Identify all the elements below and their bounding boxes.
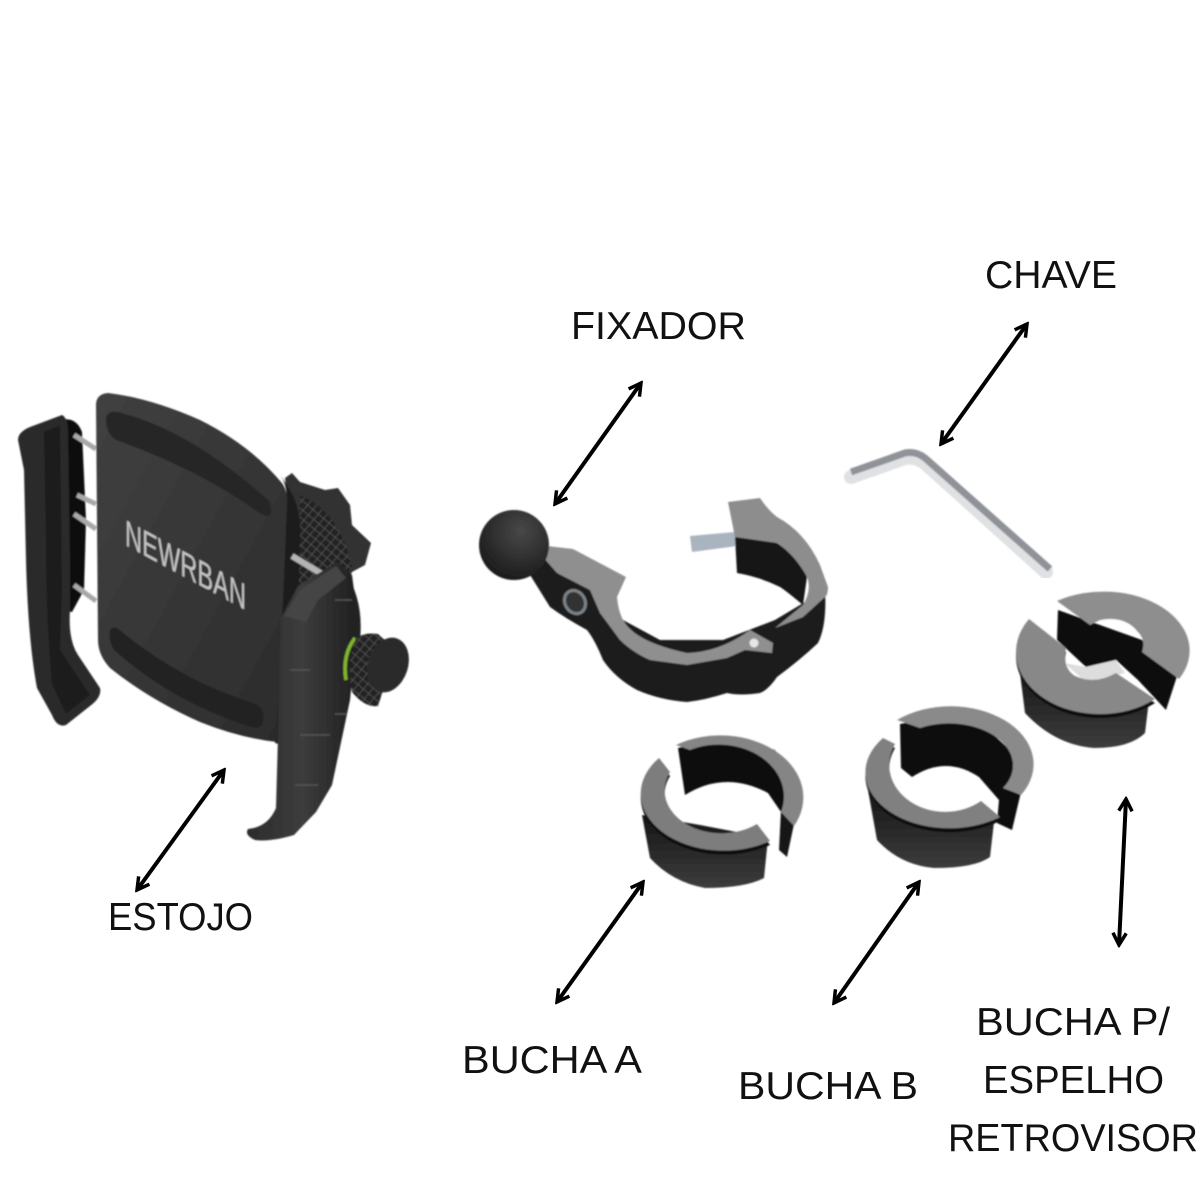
arrow: estojo [137,770,224,890]
inner slot wall [1057,610,1179,710]
threaded bolt [690,532,737,552]
logo: NEWRBAN [125,512,246,619]
arrow: chave [941,324,1027,444]
label: chave: CHAVE [985,254,1117,297]
label: fixador: FIXADOR [571,305,746,348]
body [1019,665,1149,748]
phone plate [96,393,287,742]
label: bucha para espelho retrovisor: RETROVISOR [948,1117,1198,1160]
arrow: bucha B [834,882,919,1003]
clamp gray top left [538,545,773,665]
front ring top [1016,619,1155,714]
label: bucha para espelho retrovisor: ESPELHO [983,1059,1164,1102]
clamp ball [479,510,549,580]
label: bucha B: BUCHA B [738,1065,918,1108]
guide rods [74,435,96,601]
inner back wall [678,738,792,812]
left clamp arm [18,415,100,726]
clamp black outer body [527,545,825,702]
front ring rim [865,742,1000,832]
side tab [779,810,794,857]
inner back wall [900,715,1021,830]
label: estojo: ESTOJO [108,896,253,939]
label: bucha para espelho retrovisor [948,1001,1198,1160]
front ring rim [1016,623,1155,718]
product: handlebar clamp (fixador) [479,498,828,702]
product: phone holder case [18,393,416,840]
right clamp arm [247,562,358,840]
guide rod right [292,556,322,574]
front ring top [865,738,1000,828]
body [642,815,768,888]
front ring rim [641,762,770,855]
clamp inner wall [735,537,807,605]
label: bucha A: BUCHA A [462,1039,642,1082]
rear knurled knob [285,473,371,640]
plate top rubber pad [106,412,271,516]
center hole [1064,660,1125,682]
body [868,790,994,868]
front ring top [641,758,770,851]
label: bucha para espelho retrovisor: BUCHA P/ [976,1001,1170,1044]
hinge pin [750,638,758,648]
product: bushing A [641,735,803,888]
arrow: bucha espelho [1119,799,1126,945]
clamp gray top right [728,498,828,628]
back plate edge [275,476,300,745]
green ring and thumb screw [345,632,416,706]
product: bushing B [865,706,1034,868]
product: mirror bushing [1016,592,1190,748]
nut insert [560,587,590,617]
back ring top [897,706,1034,795]
arrow: fixador [555,383,641,504]
back ring top [1057,592,1190,679]
back ring top [676,735,803,826]
arrow: bucha A [557,882,643,1002]
plate bottom rubber pad [110,627,263,728]
product: hex key (chave) [851,453,1050,572]
